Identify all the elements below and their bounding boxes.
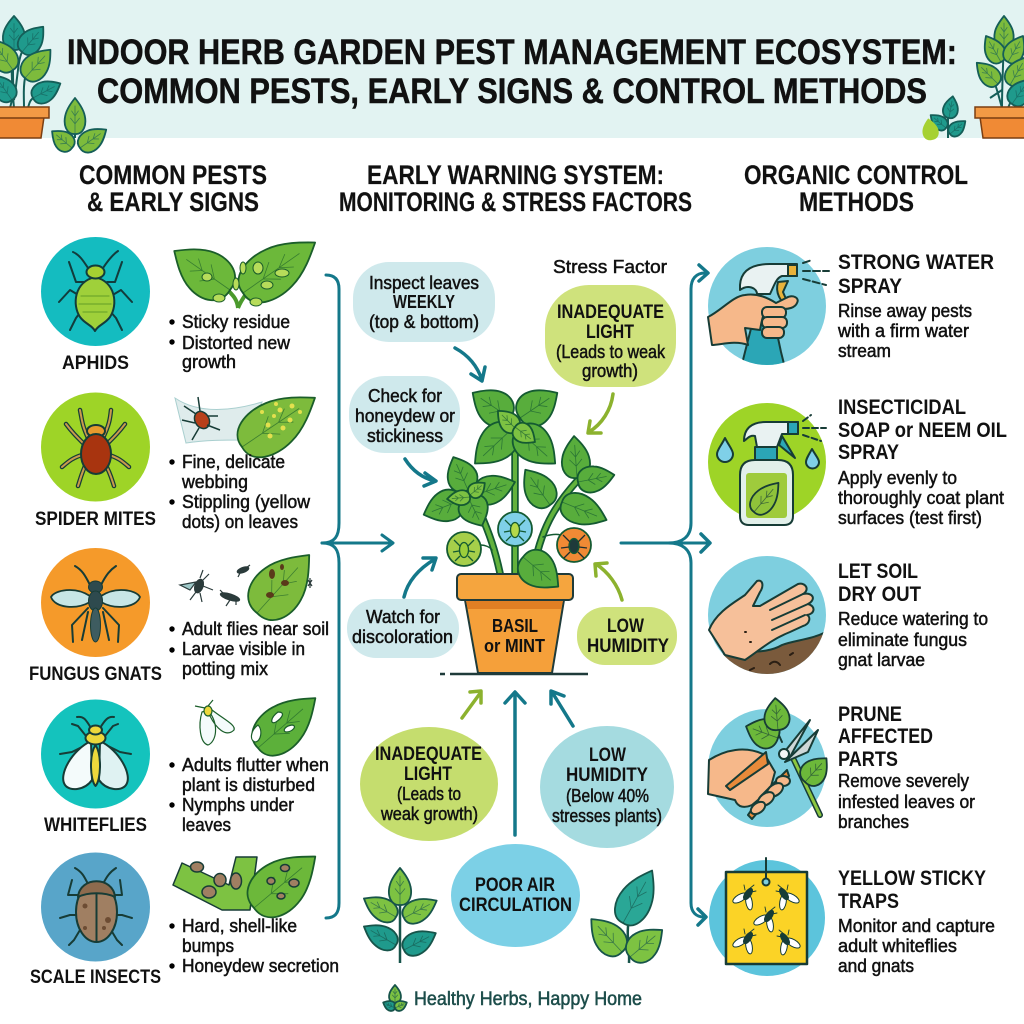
panel: monitoring bubble inspect: (top & bottom): [369, 312, 479, 332]
text: insecticidal soap: SPRAY: [838, 441, 899, 464]
text: whitefly signs: [169, 755, 329, 835]
icon: hand with spray bottle: [708, 247, 829, 368]
icon: sprig left: [358, 868, 442, 963]
text: fungus gnat signs: potting mix: [182, 659, 268, 679]
panel: stress bubble inadequate light: LIGHT: [586, 322, 634, 343]
arrow: light to plant: [588, 394, 613, 433]
panel: monitoring bubble inspect: Inspect leaves: [369, 273, 479, 293]
icon: hand with pruning shears: [708, 697, 836, 827]
text: insecticidal soap: thoroughly coat plant: [838, 488, 1004, 508]
left leaf cluster: [418, 451, 519, 532]
panel: yellow sticky traps: [709, 858, 995, 976]
illustration: scales on stem and leaf: [173, 837, 331, 927]
text: let soil dry out: gnat larvae: [838, 650, 925, 670]
panel: strong water spray: [708, 247, 994, 368]
text: yellow sticky traps: and gnats: [838, 956, 914, 976]
text: aphid signs: Sticky residue: [182, 312, 290, 332]
icon: pest badge right: [557, 528, 591, 562]
panel: stress bubble inadequate light: (Leads to weak: [556, 342, 666, 362]
panel: monitoring bubble inspect: [353, 262, 495, 342]
icon: header sprig right: [920, 95, 970, 141]
text: yellow sticky traps: YELLOW STICKY: [838, 867, 986, 890]
text: strong water spray: stream: [838, 341, 891, 361]
arrow: inspect to plant: [455, 348, 485, 381]
stems: [480, 425, 578, 573]
icon: pest badge left: [447, 532, 481, 566]
text: whitefly signs: Nymphs under: [182, 795, 294, 815]
icon: neem oil spray bottle: [708, 403, 826, 525]
illustration: aphids on leaves: [161, 223, 329, 312]
panel: stress circle low humidity: HUMIDITY: [566, 765, 648, 786]
title: [67, 33, 957, 111]
text: let soil dry out: eliminate fungus: [838, 630, 967, 650]
heading: organic control methods: ORGANIC CONTROL: [744, 160, 968, 190]
text: prune affected parts: PRUNE: [838, 703, 902, 726]
label: whiteflies: WHITEFLIES: [44, 815, 147, 836]
text: strong water spray: Rinse away pests: [838, 301, 972, 321]
text: spider mite signs: Stippling (yellow: [182, 492, 311, 512]
text: insecticidal soap: surfaces (test first): [838, 508, 982, 528]
panel: stress bubble low humidity: [577, 607, 677, 665]
right leaves: [513, 435, 617, 534]
text: prune affected parts: PARTS: [838, 748, 898, 771]
panel: stress circle inadequate light: weak growth): [380, 804, 478, 824]
panel: stress circle inadequate light: (Leads to: [397, 784, 461, 804]
footer: tagline: Healthy Herbs, Happy Home: [414, 989, 642, 1010]
icon: header sprig left: [46, 98, 112, 156]
arrow: air circulation up: [505, 692, 525, 835]
panel: fungus gnats: [29, 538, 329, 685]
panel: let soil dry out: [708, 556, 988, 680]
panel: stress bubble inadequate light: [545, 285, 676, 387]
text: scale insect signs: bumps: [182, 936, 234, 956]
icon: pest badge center: [498, 512, 532, 546]
arrow: honeydew to plant: [405, 459, 436, 486]
text: scale insect signs: Honeydew secretion: [182, 956, 339, 976]
panel: monitoring bubble honeydew: [349, 376, 460, 453]
illustration: central basil plant: [418, 378, 617, 573]
panel: monitoring bubble discoloration: [347, 599, 459, 658]
text: strong water spray: SPRAY: [838, 275, 902, 298]
text: aphid signs: Distorted new: [182, 333, 291, 353]
text: let soil dry out: DRY OUT: [838, 583, 921, 606]
panel: monitoring bubble inspect: WEEKLY: [393, 292, 455, 312]
label: aphids: APHIDS: [62, 353, 129, 374]
illustration: webbing and stippled leaf: [175, 378, 329, 467]
icon: spider mite: [41, 392, 150, 502]
panel: stress circle inadequate light: [360, 727, 498, 841]
text: insecticidal soap: INSECTICIDAL: [838, 396, 966, 419]
text: whitefly signs: leaves: [182, 815, 231, 835]
text: spider mite signs: webbing: [181, 472, 248, 492]
panel: aphids: [41, 223, 329, 374]
panel: stress circle poor air circulation: [451, 844, 580, 947]
panel: monitoring bubble discoloration: discoloration: [352, 627, 453, 647]
heading: stress factor: Stress Factor: [553, 257, 667, 277]
text: prune affected parts: Remove severely: [838, 771, 969, 791]
text: prune affected parts: AFFECTED: [838, 725, 933, 748]
text: whitefly signs: plant is disturbed: [182, 775, 315, 795]
label: spider mites: SPIDER MITES: [35, 509, 156, 530]
panel: monitoring bubble honeydew: Check for: [368, 386, 442, 406]
text: strong water spray: STRONG WATER: [838, 251, 994, 274]
icon: header pot right: [975, 107, 1024, 138]
icon: header plant left: [0, 16, 65, 108]
footer: tagline: [381, 985, 642, 1012]
text: scale insect signs: Hard, shell-like: [182, 916, 297, 936]
icon: header pot left: [0, 107, 49, 138]
text: prune affected parts: [838, 703, 975, 832]
heading: early warning system: EARLY WARNING SYSTEM:: [367, 160, 664, 190]
heading: common pests: [79, 160, 267, 217]
arrow: humidity to plant: [595, 563, 622, 600]
illustration: terracotta pot: or MINT: [484, 636, 545, 656]
text: insecticidal soap: [838, 396, 1007, 528]
arrow: inadequate light up: [462, 691, 481, 718]
text: fungus gnat signs: Larvae visible in: [182, 639, 305, 659]
text: yellow sticky traps: TRAPS: [838, 890, 899, 913]
arrow: low humidity up: [551, 691, 573, 726]
text: yellow sticky traps: Monitor and capture: [838, 916, 995, 936]
text: let soil dry out: LET SOIL: [838, 560, 918, 583]
top leaf cluster: [463, 378, 567, 477]
text: insecticidal soap: Apply evenly to: [838, 468, 957, 488]
heading: common pests: & EARLY SIGNS: [87, 187, 259, 217]
panel: stress circle poor air circulation: CIRCULATION: [459, 895, 572, 916]
panel: whiteflies: [41, 681, 330, 836]
panel: spider mites: [35, 378, 329, 532]
text: strong water spray: with a firm water: [837, 321, 969, 341]
illustration: terracotta pot: BASIL: [492, 616, 538, 636]
panel: monitoring bubble honeydew: stickiness: [367, 426, 443, 446]
panel: stress circle poor air circulation: POOR AIR: [475, 875, 555, 896]
heading: organic control methods: METHODS: [799, 187, 914, 217]
icon: fungus gnat: [41, 548, 150, 657]
label: fungus gnats: FUNGUS GNATS: [29, 664, 162, 685]
text: let soil dry out: Reduce watering to: [838, 609, 988, 629]
heading: organic control methods: [744, 160, 968, 217]
arrow: left bracket into plant: [322, 275, 393, 918]
illustration: gnats and chewed leaf: [180, 538, 328, 630]
illustration: whiteflies and leaf: [195, 681, 330, 765]
icon: aphid: [41, 237, 150, 346]
panel: stress circle low humidity: LOW: [589, 745, 626, 766]
label: scale insects: SCALE INSECTS: [30, 967, 161, 988]
icon: header plant right: [970, 16, 1024, 110]
heading: common pests: COMMON PESTS: [79, 160, 267, 190]
panel: stress circle inadequate light: INADEQUATE: [375, 744, 482, 765]
text: prune affected parts: infested leaves or: [838, 792, 975, 812]
text: yellow sticky traps: adult whiteflies: [838, 936, 957, 956]
panel: stress bubble low humidity: LOW: [607, 616, 644, 637]
text: spider mite signs: [169, 452, 311, 532]
text: prune affected parts: branches: [838, 812, 909, 832]
text: scale insect signs: [169, 916, 339, 976]
panel: stress circle low humidity: [540, 726, 674, 848]
header band: [0, 0, 1024, 156]
text: aphid signs: growth: [182, 352, 236, 372]
icon: hand over soil: [708, 556, 826, 680]
arrow: discoloration to plant: [404, 558, 436, 597]
text: yellow sticky traps: [838, 867, 995, 976]
heading: early warning system: MONITORING & STRESS FACTORS: [339, 187, 692, 217]
text: aphid signs: [169, 312, 291, 372]
panel: insecticidal soap or neem oil: [708, 396, 1007, 528]
arrow: right bracket to control methods: [621, 265, 710, 925]
panel: stress bubble inadequate light: INADEQUATE: [557, 302, 664, 323]
text: fungus gnat signs: Adult flies near soil: [182, 619, 329, 639]
panel: stress circle low humidity: stresses plants): [552, 806, 662, 826]
text: spider mite signs: Fine, delicate: [182, 452, 285, 472]
panel: prune affected parts: [708, 697, 975, 832]
icon: sprig right: [581, 862, 672, 968]
panel: stress bubble low humidity: HUMIDITY: [587, 636, 669, 657]
title: COMMON PESTS, EARLY SIGNS & CONTROL METHODS: [97, 72, 927, 111]
icon: footer logo: [381, 985, 409, 1012]
text: fungus gnat signs: [169, 619, 329, 679]
panel: stress circle inadequate light: LIGHT: [404, 764, 452, 785]
illustration: terracotta pot: [440, 543, 588, 674]
icon: whitefly: [41, 700, 150, 808]
panel: monitoring bubble honeydew: honeydew or: [355, 406, 455, 426]
panel: monitoring bubble discoloration: Watch for: [366, 607, 440, 627]
text: let soil dry out: [838, 560, 988, 670]
text: strong water spray: [837, 251, 994, 361]
panel: stress circle low humidity: (Below 40%: [566, 786, 649, 806]
icon: scale insect: [41, 852, 150, 962]
panel: stress bubble inadequate light: growth): [582, 361, 638, 381]
panel: scale insects: [30, 837, 339, 988]
text: spider mite signs: dots) on leaves: [182, 512, 298, 532]
heading: early warning system: [339, 160, 692, 217]
text: whitefly signs: Adults flutter when: [182, 755, 329, 775]
icon: yellow sticky trap: [709, 858, 825, 976]
